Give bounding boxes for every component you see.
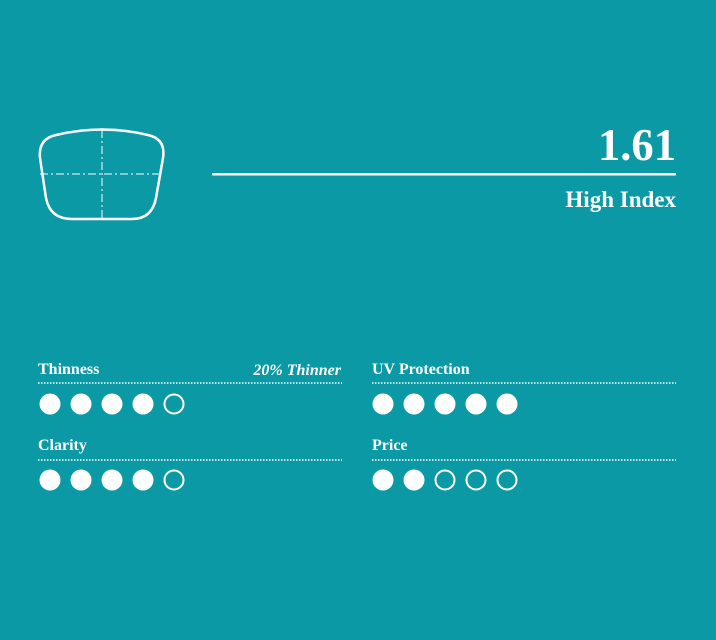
rating: Price: Price bbox=[372, 437, 408, 454]
icon: lens bbox=[40, 130, 163, 219]
rule bbox=[212, 173, 676, 176]
rating: UV Protection: UV Protection bbox=[372, 361, 470, 378]
rating: UV Protection bbox=[372, 361, 676, 414]
heading: 1.61: 1.61 bbox=[598, 119, 676, 170]
rating: Price bbox=[372, 437, 676, 490]
subheading: High Index: High Index bbox=[565, 187, 676, 212]
rating: Thinness: 20% Thinner bbox=[252, 362, 342, 379]
rating: Thinness bbox=[38, 361, 342, 414]
rating: Thinness: Thinness bbox=[38, 361, 99, 378]
rating: Clarity bbox=[38, 437, 342, 490]
rating: Clarity: Clarity bbox=[38, 437, 87, 454]
